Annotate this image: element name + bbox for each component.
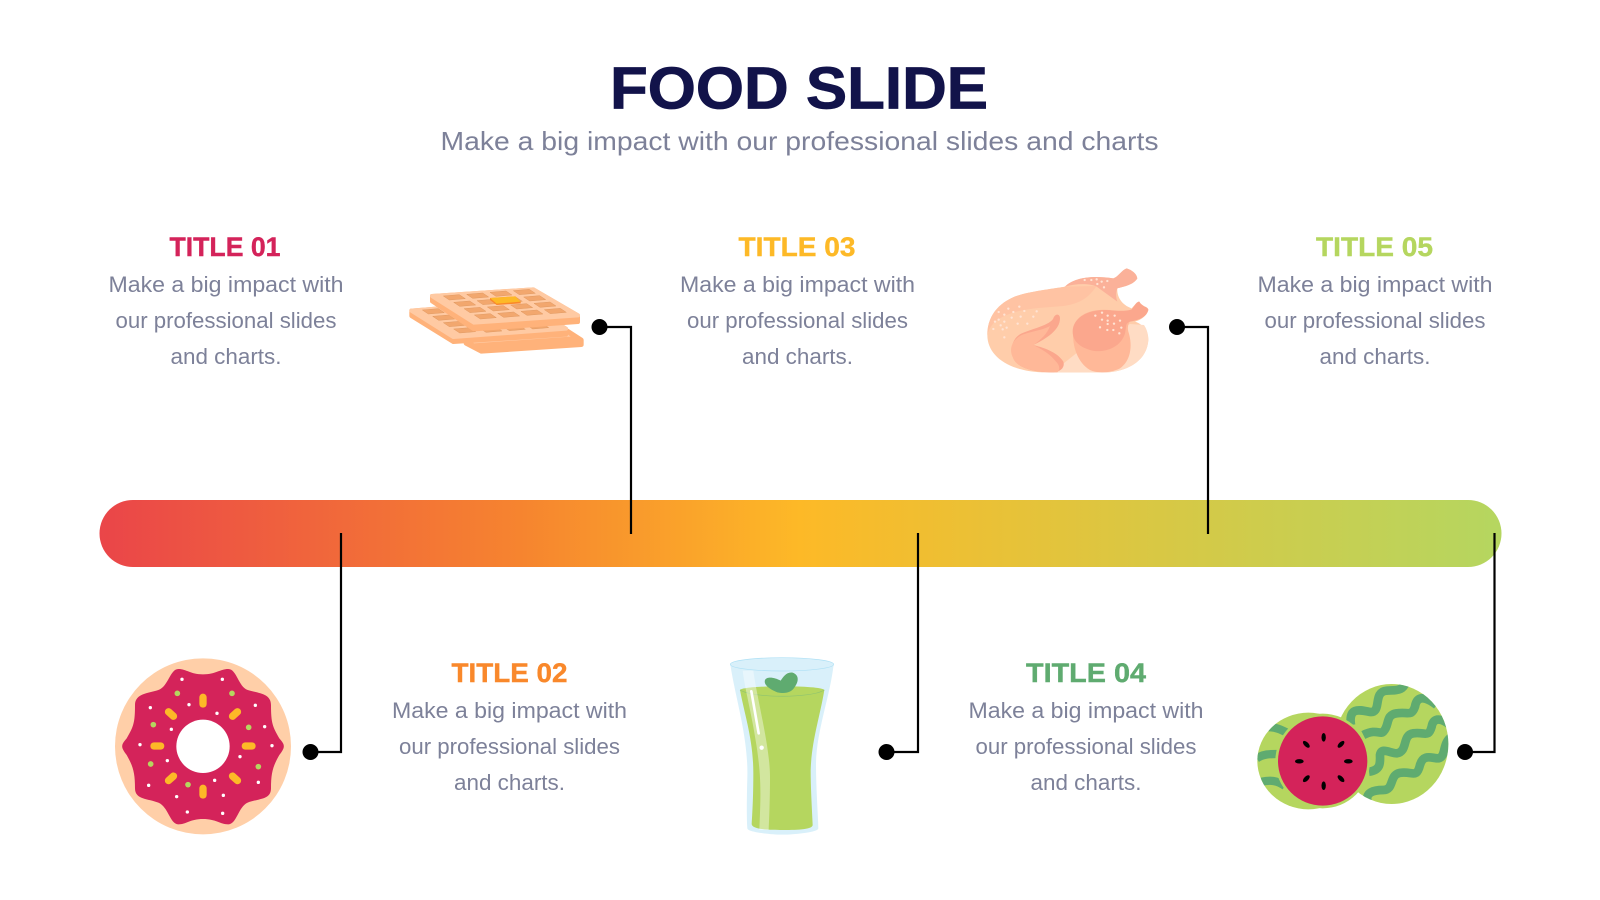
text block: title 04: our professional slides [976, 734, 1196, 759]
icon: roast chicken [987, 268, 1148, 372]
icon: donut [115, 658, 291, 834]
text block: title 01: Make a big impact with [108, 272, 344, 297]
text block: title 04: and charts. [1030, 770, 1142, 795]
connector: chicken to bar [1169, 319, 1208, 534]
text block: title 01 [108, 232, 344, 369]
subtitle: Make a big impact with our professional slides and charts [440, 126, 1158, 156]
text block: title 03 [680, 232, 915, 369]
text block: title 02 [392, 658, 627, 795]
text block: title 05: and charts. [1320, 344, 1430, 369]
icon: green smoothie glass [730, 658, 834, 835]
text block: title 03: TITLE 03 [738, 232, 856, 262]
text block: title 02: our professional slides [399, 734, 620, 759]
text block: title 05 [1258, 232, 1492, 369]
text block: title 02: TITLE 02 [452, 658, 568, 688]
icon: waffles [411, 289, 581, 351]
text block: title 05: Make a big impact with [1258, 272, 1492, 297]
text block: title 01: and charts. [170, 344, 282, 369]
connector: drink to bar [878, 533, 918, 760]
text block: title 04: Make a big impact with [968, 698, 1204, 723]
text block: title 04: TITLE 04 [1026, 658, 1146, 688]
text block: title 01: our professional slides [116, 308, 336, 333]
icon: watermelon [1257, 680, 1452, 809]
connector: waffle to bar [592, 319, 631, 534]
text block: title 04 [968, 658, 1204, 795]
text block: title 02: and charts. [454, 770, 565, 795]
text block: title 02: Make a big impact with [392, 698, 627, 723]
gradient timeline bar [100, 500, 1502, 567]
text block: title 01: TITLE 01 [170, 232, 280, 262]
text block: title 05: our professional slides [1264, 308, 1486, 333]
connector: donut to bar [302, 533, 341, 760]
text block: title 03: our professional slides [687, 308, 908, 333]
text block: title 03: Make a big impact with [680, 272, 915, 297]
text block: title 03: and charts. [742, 344, 853, 369]
title: FOOD SLIDE [610, 56, 988, 122]
text block: title 05: TITLE 05 [1316, 232, 1433, 262]
connector: watermelon to bar [1457, 533, 1494, 760]
